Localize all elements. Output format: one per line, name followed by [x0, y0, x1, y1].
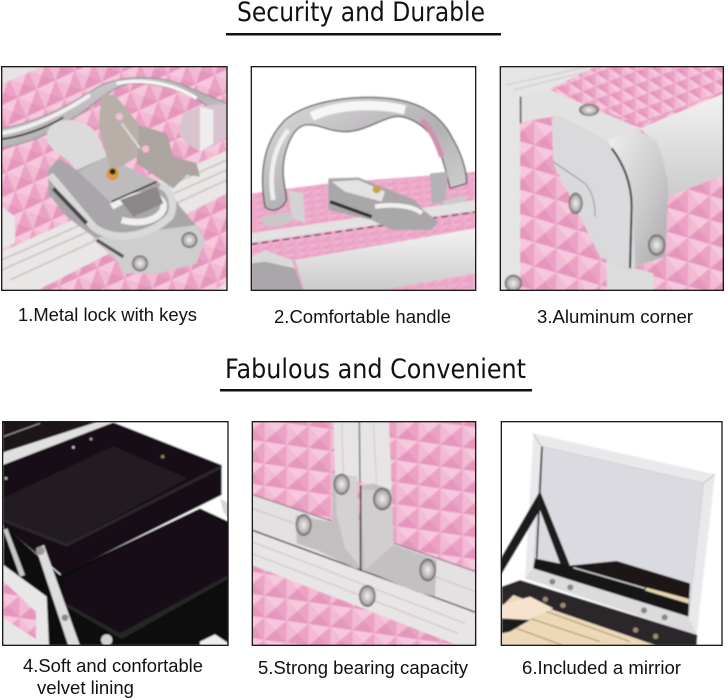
panel: aluminum corner — [500, 66, 724, 292]
cosmetics tray — [502, 580, 697, 646]
caption 1: 1.Metal lock with keys — [18, 305, 197, 325]
plates — [296, 474, 362, 569]
caption 4 — [23, 656, 203, 698]
heading: Fabulous and Convenient: Fabulous and Convenient — [225, 354, 526, 385]
lock — [328, 177, 438, 230]
handle — [2, 78, 227, 148]
keys — [98, 95, 138, 170]
horizontal rail — [253, 494, 475, 612]
arms — [3, 528, 25, 577]
panel: bearing hinge — [252, 421, 476, 646]
caption 5: 5.Strong bearing capacity — [258, 658, 468, 678]
panel: metal lock with keys — [1, 66, 228, 291]
mirror frame — [525, 433, 715, 635]
caption 2: 2.Comfortable handle — [274, 307, 451, 327]
side panel — [3, 564, 49, 646]
panel: comfortable handle — [251, 66, 476, 291]
mirror glass — [533, 447, 703, 617]
panel: mirror — [501, 421, 723, 646]
caption 4: velvet lining — [37, 678, 134, 698]
vertical rails — [333, 421, 392, 490]
handle — [262, 97, 467, 210]
caption 3: 3.Aluminum corner — [537, 307, 693, 327]
panel: velvet lining — [2, 421, 229, 646]
lock plate — [48, 158, 203, 238]
caption 6: 6.Included a mirrior — [522, 658, 681, 678]
caption 4: 4.Soft and confortable — [23, 656, 203, 676]
corner plate — [551, 116, 643, 268]
